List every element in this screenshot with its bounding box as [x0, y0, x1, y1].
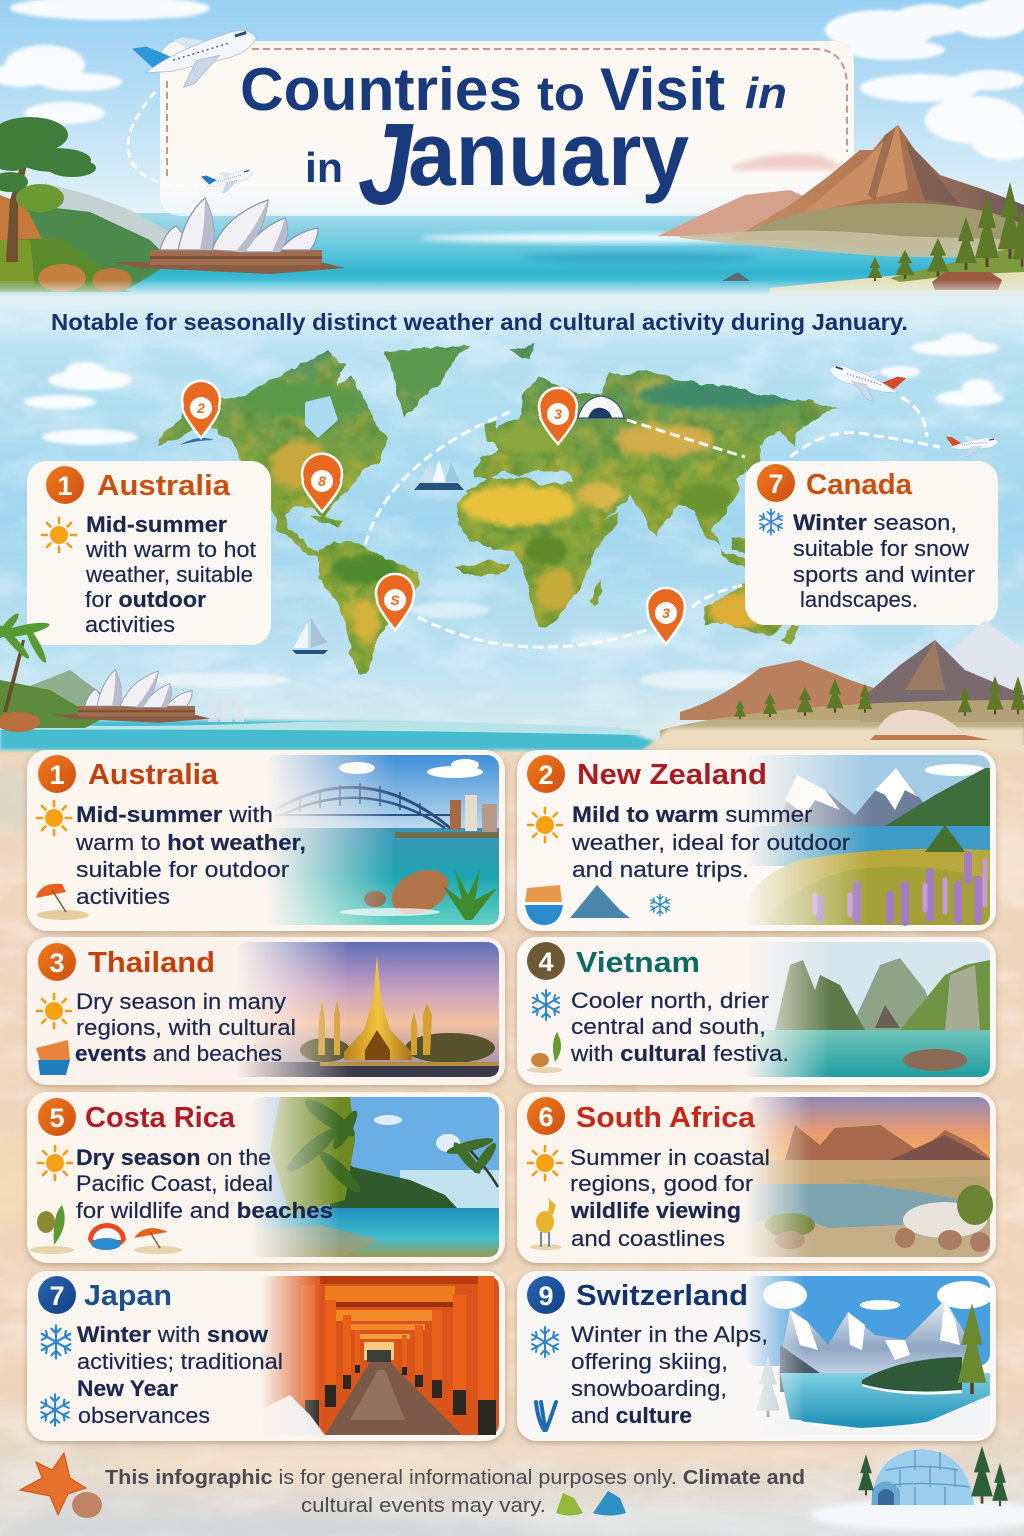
card photo: Cape coast at sunset [745, 1097, 993, 1257]
title: Countries [240, 56, 522, 123]
pin 5 [376, 574, 414, 630]
route lines [365, 397, 940, 647]
icon: beach umbrella [36, 884, 89, 920]
number badge: 7 [768, 469, 784, 499]
footer text: cultural events may vary. [301, 1494, 546, 1517]
card 1: Australia [27, 750, 505, 931]
icon: sun [528, 1146, 562, 1180]
pin 6: 3 [662, 605, 670, 621]
card text: Winter with snow [77, 1322, 269, 1347]
icon: snow crystals [41, 1394, 69, 1426]
icon: sun [42, 518, 76, 552]
icon: kayak bowl [525, 885, 563, 925]
lower right scene [640, 620, 1024, 752]
card text: central and south, [571, 1014, 766, 1039]
card text [77, 1322, 283, 1428]
card photo: alpine lake [745, 1276, 993, 1435]
icon: snowflake [533, 990, 559, 1020]
landmark: small opera house [51, 670, 211, 723]
card text: Dry season in many [76, 989, 287, 1014]
pin 8: 8 [318, 473, 326, 489]
card text [570, 1145, 770, 1251]
icon: rainbow shell [88, 1223, 126, 1250]
footer text [105, 1466, 805, 1517]
card photo: limestone bay [745, 942, 990, 1077]
map clouds [24, 333, 1004, 690]
icon: giraffe [530, 1198, 562, 1250]
card text: Dry season on the [76, 1145, 271, 1170]
card text: warm to hot weather, [75, 830, 306, 855]
small whale shape under pin 2 [180, 438, 214, 445]
callout text: suitable for snow [793, 536, 970, 561]
callout text: sports and winter [793, 562, 976, 587]
card text [570, 988, 789, 1066]
card 7: Japan [27, 1271, 505, 1441]
card text: with cultural festiva. [570, 1041, 789, 1066]
card photo: tropical beach [250, 1094, 499, 1257]
title: in [745, 69, 787, 118]
icon: sun [37, 994, 71, 1028]
right shore and trees [722, 182, 1024, 295]
card photo: alpine lake and lupins [745, 755, 990, 925]
card text: and coastlines [571, 1226, 725, 1251]
footer [20, 1446, 1024, 1531]
landmark: opera house [110, 198, 345, 274]
number badge: 3 [49, 948, 65, 978]
snow mound [810, 1499, 1024, 1531]
card text: offering skiing, [571, 1349, 728, 1374]
card 2: New Zealand [517, 750, 996, 931]
pin 2 [182, 381, 220, 438]
callout text [85, 512, 257, 637]
title: Visit [600, 56, 725, 123]
icon: blue stone [593, 1491, 626, 1516]
callout text: landscapes. [800, 587, 918, 612]
title: anuary [408, 105, 689, 205]
number badge [38, 1098, 76, 1136]
card photo: Thai temple at sunset [235, 942, 499, 1077]
header clouds [0, 0, 1024, 160]
card text: regions, with cultural [76, 1015, 296, 1040]
icon: leaf [527, 1032, 563, 1073]
icon: plane top right [824, 355, 906, 409]
number badge [46, 466, 84, 504]
icon: snowflake [42, 1326, 70, 1358]
icon: small plane right [946, 431, 999, 458]
number badge [38, 755, 76, 793]
title panel [160, 41, 854, 216]
pin 2: 2 [196, 400, 205, 416]
card text: Mild to warm summer [572, 802, 813, 827]
card text: wildlife viewing [570, 1198, 741, 1223]
card heading: South Africa [576, 1102, 756, 1134]
card text: and nature trips. [572, 857, 749, 882]
card text [571, 802, 851, 882]
card text [571, 1322, 768, 1428]
number badge: 5 [49, 1103, 65, 1133]
card text [76, 1145, 333, 1223]
card heading: New Zealand [577, 759, 767, 791]
icon: small plane [201, 162, 256, 197]
title: in [305, 144, 343, 191]
pins [182, 381, 685, 644]
card text [75, 989, 296, 1066]
card text: Mid-summer with [76, 802, 273, 827]
pin 6 [647, 588, 685, 644]
subtitle: Notable for seasonally distinct weather and cultural activity during January. [51, 309, 908, 335]
number badge [757, 464, 795, 502]
number badge: 7 [49, 1281, 65, 1311]
card text: activities; traditional [77, 1349, 283, 1374]
footer text: This infographic is for general informational purposes only. Climate and [105, 1466, 805, 1489]
icon: snowflake [532, 1327, 558, 1357]
card heading: Vietnam [576, 947, 700, 979]
icon: igloo [871, 1449, 974, 1505]
callout text: weather, suitable [85, 562, 253, 587]
card text: Summer in coastal [570, 1145, 770, 1170]
sailboat south Atlantic [292, 618, 328, 654]
Hudson Bay [305, 396, 338, 438]
sea [0, 213, 1024, 298]
callout heading: Canada [806, 469, 913, 501]
callout: Canada [745, 461, 998, 625]
icon: green stone [556, 1493, 583, 1516]
card photo: Sydney harbour [265, 755, 499, 925]
callout text: Winter season, [793, 510, 957, 535]
card text [75, 802, 306, 909]
icon: leaf [30, 1205, 74, 1254]
number badge: 9 [538, 1281, 554, 1311]
icon: sun [38, 1146, 72, 1180]
callout text: for outdoor [85, 587, 206, 612]
card heading: Switzerland [576, 1280, 748, 1312]
icon: large plane [132, 13, 264, 98]
flight path [128, 92, 205, 186]
header scene [0, 0, 1024, 310]
card photo: torii gate tunnel [260, 1276, 499, 1435]
card heading: Australia [88, 759, 219, 791]
pin 3 [539, 388, 577, 444]
card text: observances [78, 1403, 210, 1428]
number badge: 6 [538, 1102, 554, 1132]
card text: snowboarding, [571, 1376, 727, 1401]
card heading: Thailand [88, 947, 215, 979]
card text: Winter in the Alps, [571, 1322, 768, 1347]
igloo near pin 3 [578, 396, 624, 418]
card text: regions, good for [570, 1171, 754, 1196]
callout text: with warm to hot [85, 537, 257, 562]
fog strip [0, 280, 1024, 310]
number badge [38, 943, 76, 981]
title: to [537, 68, 585, 121]
card text: New Year [77, 1376, 178, 1401]
number badge [527, 1097, 565, 1135]
card 6: South Africa [517, 1092, 996, 1263]
card text: activities [76, 884, 170, 909]
callout text [793, 510, 976, 612]
card text: Cooler north, drier [571, 988, 770, 1013]
icon: skis [536, 1402, 556, 1430]
card text: and culture [571, 1403, 692, 1428]
pin 8 [302, 454, 342, 512]
card text: suitable for outdoor [76, 857, 290, 882]
lower left scene [0, 611, 680, 750]
card 5: Costa Rica [27, 1092, 505, 1263]
icon: beach gear [36, 1040, 70, 1075]
card text: for wildlife and beaches [76, 1198, 333, 1223]
card text: weather, ideal for outdoor [571, 830, 851, 855]
number badge: 2 [538, 760, 554, 790]
number badge: 1 [57, 471, 73, 501]
sailboat mid Atlantic [414, 460, 464, 490]
number badge: 4 [538, 947, 554, 977]
icon: snowflake [760, 509, 782, 535]
continents [158, 342, 838, 676]
icon: glacier tent [570, 885, 630, 918]
number badge [527, 1276, 565, 1314]
icon: pine trees [858, 1446, 1008, 1506]
callout text: Mid-summer [86, 512, 227, 537]
mountain right [658, 125, 1024, 258]
world map [24, 330, 1004, 690]
left coast with tree [0, 117, 175, 292]
card text: events and beaches [75, 1041, 282, 1066]
icon: starfish [20, 1453, 86, 1515]
number badge [527, 942, 565, 980]
icon: shell [72, 1492, 102, 1518]
icon: sun [528, 808, 562, 842]
card heading: Costa Rica [85, 1102, 236, 1134]
callout text: activities [85, 612, 175, 637]
callout: Australia [27, 461, 271, 645]
card text: Pacific Coast, ideal [76, 1171, 273, 1196]
pin 5: S [390, 592, 400, 608]
card heading: Japan [84, 1280, 172, 1312]
number badge [38, 1276, 76, 1314]
icon: snowflakes [651, 894, 669, 916]
title [240, 56, 787, 229]
icon: sun [37, 801, 71, 835]
card 4: Vietnam [517, 937, 996, 1085]
card 9: Switzerland [517, 1271, 996, 1441]
callout heading: Australia [97, 470, 231, 502]
title: J [358, 99, 414, 229]
number badge: 1 [49, 760, 65, 790]
pin 3: 3 [554, 406, 562, 422]
icon: beach umbrella [134, 1228, 182, 1254]
number badge [527, 755, 565, 793]
card 3: Thailand [27, 937, 505, 1085]
